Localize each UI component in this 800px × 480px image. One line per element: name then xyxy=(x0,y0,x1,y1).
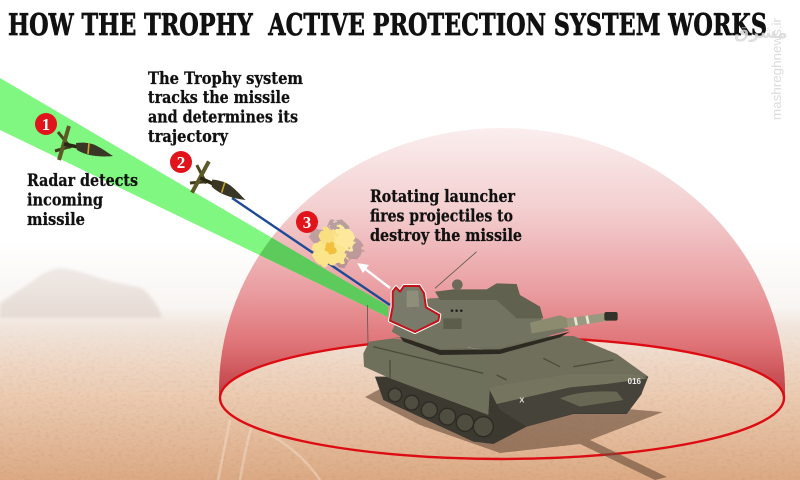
turret xyxy=(392,295,570,348)
label: step 3: destroy the missile xyxy=(370,226,522,246)
hull emblem: X xyxy=(519,396,524,405)
hull top xyxy=(393,336,648,403)
marker 1 xyxy=(35,113,57,135)
trophy launcher outline xyxy=(390,286,439,332)
marker 2: 2 xyxy=(177,153,185,172)
marker 1: 1 xyxy=(42,115,50,134)
label: step 2: tracks the missile xyxy=(148,88,290,108)
tank shadow on ground xyxy=(365,389,667,480)
label: step 1: missile xyxy=(27,210,85,230)
radar beam xyxy=(0,78,388,317)
missile 1 xyxy=(55,126,113,160)
tank xyxy=(363,252,648,444)
tracks xyxy=(375,377,642,444)
road wheels xyxy=(388,388,493,437)
white arrow: projectile direction xyxy=(357,263,390,288)
label: step 3: Rotating launcher xyxy=(370,187,516,207)
gun barrel xyxy=(530,312,618,333)
watermark xyxy=(734,17,788,120)
tow bar xyxy=(560,391,623,407)
explosion xyxy=(310,220,363,268)
label: step 2 xyxy=(148,69,303,147)
label: step 1: incoming xyxy=(27,190,103,210)
marker 3 xyxy=(296,211,318,233)
turret roof gear xyxy=(435,279,543,329)
hull front xyxy=(488,377,648,427)
watermark: mashreghnews.ir xyxy=(769,17,784,120)
red detection ring xyxy=(220,337,784,459)
under-turret shadow xyxy=(400,332,570,355)
protective dome xyxy=(219,128,785,398)
marker 2 xyxy=(170,151,192,173)
hull side xyxy=(363,338,490,415)
antenna xyxy=(367,252,487,383)
marker 3: 3 xyxy=(303,213,311,232)
label: step 1 xyxy=(27,171,138,230)
background: desert scene xyxy=(0,266,800,480)
label: step 2: and determines its xyxy=(148,108,298,128)
watermark: مشرق xyxy=(734,23,788,43)
label: step 2: trajectory xyxy=(148,127,229,147)
hull number: 016 xyxy=(628,377,642,386)
label: step 2: The Trophy system xyxy=(148,69,303,89)
label: step 3 xyxy=(370,187,522,246)
label: step 1: Radar detects xyxy=(27,171,138,191)
missile 2 xyxy=(188,159,252,204)
hull details xyxy=(373,347,613,380)
tracking line xyxy=(232,198,390,305)
label: step 3: fires projectiles to xyxy=(370,206,513,226)
